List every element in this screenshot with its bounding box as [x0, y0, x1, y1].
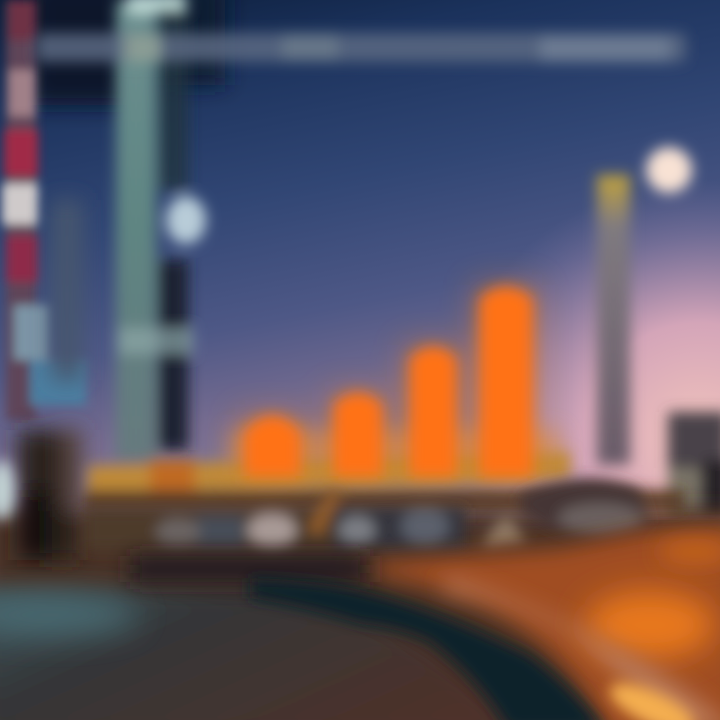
golden walkway glow [604, 674, 700, 720]
tower: tall teal skyscraper [116, 0, 206, 460]
bar 1 [245, 416, 300, 476]
bar 4 [480, 287, 532, 476]
lower scene base [0, 510, 720, 720]
dark shadow under deck [130, 556, 370, 582]
bar 3 [410, 347, 456, 476]
bar glow [240, 285, 537, 475]
title band (illegible blurred heading) [36, 33, 686, 62]
dark curved kerb [250, 578, 605, 720]
tower: left striped mast [2, 0, 86, 420]
orange haze behind bars [230, 430, 560, 470]
dark left pillar [18, 430, 82, 560]
tower: grey background building [52, 200, 82, 380]
orange waterfront lower right [340, 525, 720, 720]
bar chart [240, 285, 537, 476]
tower: right spire with light [597, 147, 692, 465]
moon [646, 147, 692, 193]
teal road highlight [0, 595, 140, 635]
road below deck with cars [84, 479, 650, 562]
pale curved walkway [440, 578, 720, 720]
dark upper left sky [30, 0, 130, 105]
bar 2 [334, 393, 382, 476]
left white glow [0, 460, 14, 520]
road surface lower left [0, 590, 530, 720]
pink horizon glow [380, 170, 720, 520]
building: far right dark [668, 412, 720, 522]
orange deck [84, 452, 684, 512]
